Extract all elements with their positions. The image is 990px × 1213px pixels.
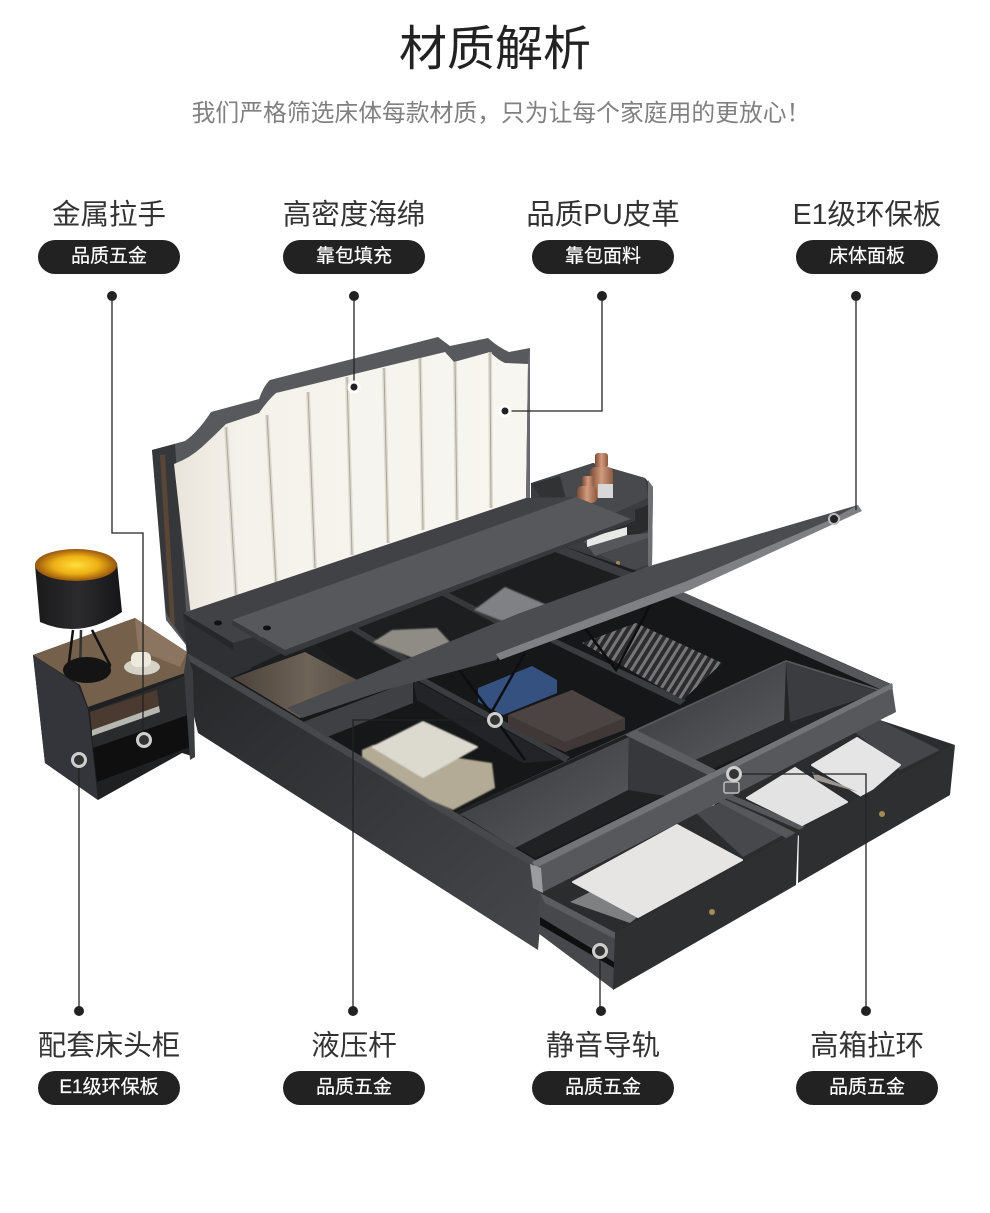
tag: PU leather: 靠包面料 [565,246,641,267]
label: high density sponge: 高密度海绵 [283,199,425,231]
tag: PU leather [532,240,674,274]
endpoint dots [74,291,871,1016]
pull ring hardware [724,782,739,793]
label: high box pull ring: 高箱拉环 [810,1030,924,1062]
ring markers [72,714,740,958]
tag: E1 board [796,240,938,274]
lower lid panel [183,497,576,650]
tea cup [124,652,160,675]
tag: metal handle: 品质五金 [71,246,147,267]
right drawer [725,720,955,883]
front right storage compartments [456,662,882,858]
hydraulic struts [459,600,653,760]
tag: hydraulic rod: 品质五金 [316,1077,392,1098]
table lamp [35,549,122,683]
tag: sponge: 靠包填充 [316,246,392,267]
label: E1 board: E1级环保板 [793,199,941,231]
leader lines [79,296,866,1011]
tag: E1 board: 床体面板 [829,246,905,267]
label: matching nightstand: 配套床头柜 [38,1030,180,1062]
stored items [362,587,722,810]
label: metal handle: 金属拉手 [52,199,166,231]
headboard [152,337,530,650]
bed frame [183,545,893,950]
copper vases [577,453,613,503]
label: hydraulic rod: 液压杆 [311,1030,397,1062]
subtitle: 我们严格筛选床体每款材质，只为让每个家庭用的更放心！ [192,100,810,127]
label: PU leather: 品质PU皮革 [526,199,680,231]
tag: sponge [283,240,425,274]
drawer underlay [700,790,806,836]
tag: pull ring: 品质五金 [829,1077,905,1098]
right bedside cabinet [531,463,653,574]
tag: nightstand [38,1071,180,1105]
tag: metal handle [38,240,180,274]
tag: hydraulic rod [283,1071,425,1105]
bedside nightstand [33,618,195,800]
left drawer [538,799,798,990]
tag: silent rail [532,1071,674,1105]
tag: silent rail: 品质五金 [565,1077,641,1098]
tag: pull ring [796,1071,938,1105]
tag: nightstand: E1级环保板 [59,1077,159,1098]
label: silent rail: 静音导轨 [546,1030,660,1062]
upper lid panel [232,497,631,656]
title: 材质解析 [399,23,591,76]
front rim of bed box [530,683,896,893]
lifted lid panel [287,505,862,718]
